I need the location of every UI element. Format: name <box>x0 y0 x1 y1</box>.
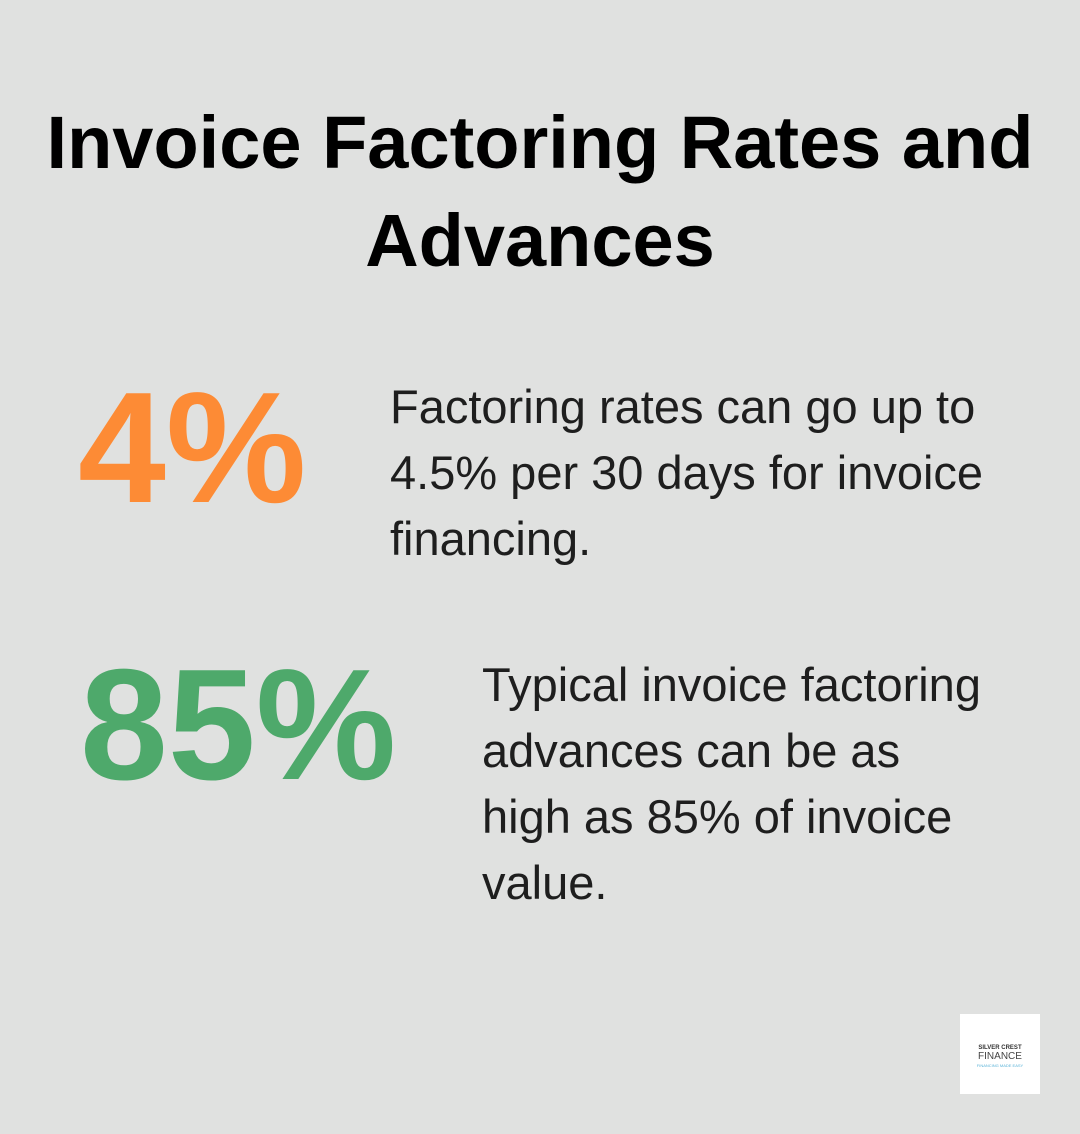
title: Advances <box>365 199 715 282</box>
text: factoring rates: 4.5% per 30 days for invoice <box>390 446 983 499</box>
logo: FINANCE <box>978 1051 1022 1062</box>
text: advances: advances can be as <box>482 724 900 777</box>
stat: 85%: 85% <box>80 637 396 813</box>
title <box>47 101 1033 282</box>
stat: 4%: 4% <box>78 360 306 536</box>
text: factoring rates: financing. <box>390 512 591 565</box>
text: advances: value. <box>482 856 607 909</box>
logo: FINANCING MADE EASY <box>977 1063 1023 1068</box>
logo <box>960 1014 1040 1094</box>
title: Invoice Factoring Rates and <box>47 101 1033 184</box>
text: advances: high as 85% of invoice <box>482 790 952 843</box>
text: advances: Typical invoice factoring <box>482 658 981 711</box>
text: factoring rates: Factoring rates can go up to <box>390 380 975 433</box>
logo: SILVER CREST <box>978 1045 1022 1051</box>
text: advances <box>482 658 981 909</box>
text: factoring rates <box>390 380 983 565</box>
